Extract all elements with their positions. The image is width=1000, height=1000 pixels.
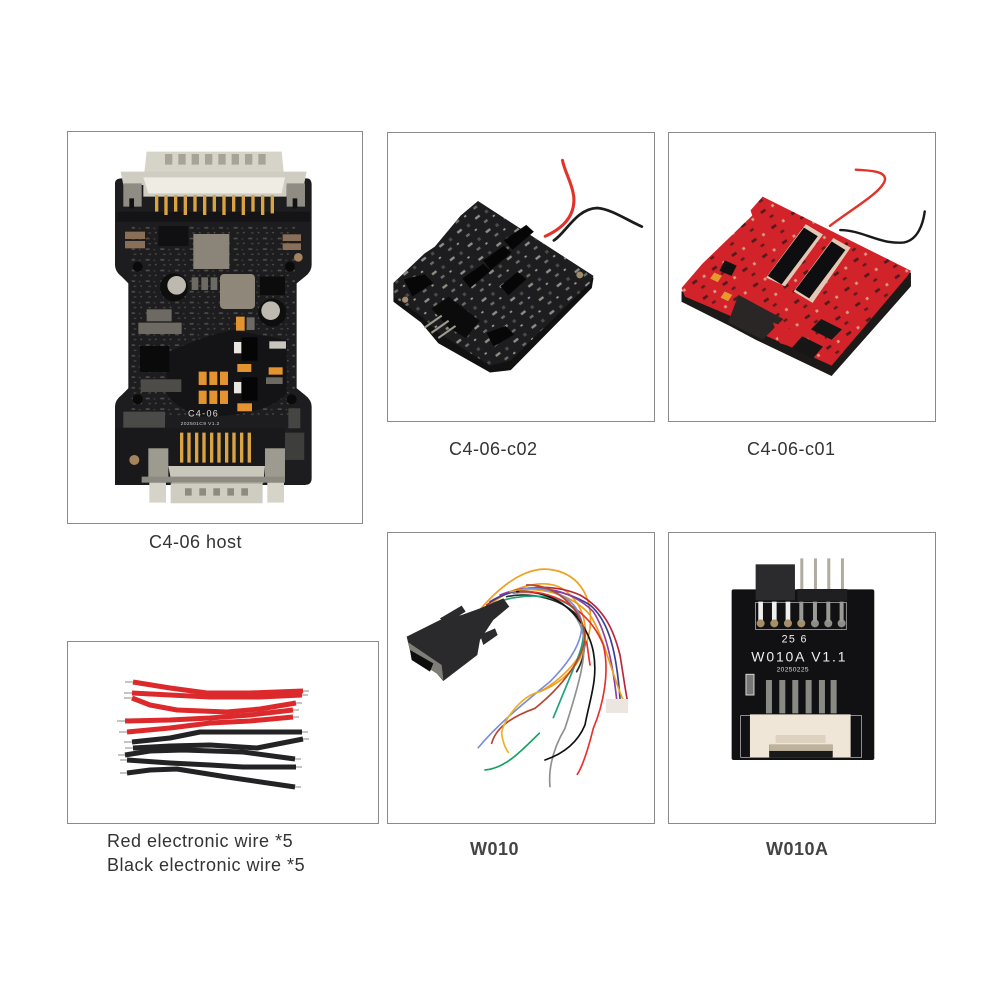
icon: C4-06 host board xyxy=(115,152,312,503)
board top xyxy=(393,201,594,366)
board text: 25 6 xyxy=(782,633,808,645)
icon: black protection board xyxy=(393,160,642,373)
chips and parts xyxy=(710,224,851,359)
wires xyxy=(545,160,642,240)
icon: black wires xyxy=(125,732,303,787)
panel: C4-06 host xyxy=(68,132,362,524)
label: wire quantities: Black electronic wire *5 xyxy=(107,855,305,875)
board label: C4-06 xyxy=(188,409,219,419)
panel: W010A xyxy=(668,532,936,824)
icon: white JST plug xyxy=(606,699,628,713)
icon: W010A adapter board: W010A V1.1 xyxy=(751,649,847,665)
wires xyxy=(830,170,925,243)
white socket xyxy=(741,714,862,758)
panel: C4-06-c02 xyxy=(388,132,654,422)
top header xyxy=(756,558,847,630)
icon: W010A adapter board xyxy=(732,558,874,760)
panel: W010 xyxy=(388,532,654,824)
icon: W010A adapter board: 20250225 xyxy=(777,666,809,673)
chips and parts xyxy=(402,225,583,347)
label: W010: W010 xyxy=(470,839,519,859)
wire tips xyxy=(117,682,309,787)
board side xyxy=(682,272,911,376)
lower pins xyxy=(746,674,837,713)
components: inductors and capacitors xyxy=(123,226,304,460)
flange and pins xyxy=(121,172,307,215)
label: C4-06-c02: C4-06-c02 xyxy=(449,439,538,459)
icon: red wires xyxy=(125,682,303,732)
bottom connector xyxy=(129,433,285,503)
icon: C4-06 host board: 202501C9 V1.2 xyxy=(181,421,220,427)
panel: electronic wires xyxy=(68,642,378,824)
label: C4-06-c01: C4-06-c01 xyxy=(747,439,836,459)
pcb xyxy=(732,589,874,760)
label: W010A: W010A xyxy=(766,839,829,859)
label: wire quantities: Red electronic wire *5 xyxy=(107,831,293,851)
board top xyxy=(682,197,911,366)
icon: W010 cable xyxy=(478,569,627,787)
label: C4-06 host: C4-06 host xyxy=(149,532,242,552)
wire bundle xyxy=(478,569,627,787)
board body xyxy=(115,178,312,485)
icon: D-sub connector xyxy=(407,598,509,681)
board side xyxy=(393,278,594,373)
panel: C4-06-c01 xyxy=(668,132,936,422)
label: wire quantities xyxy=(107,831,305,875)
top connector xyxy=(144,152,284,175)
icon: red protection board xyxy=(682,170,925,376)
